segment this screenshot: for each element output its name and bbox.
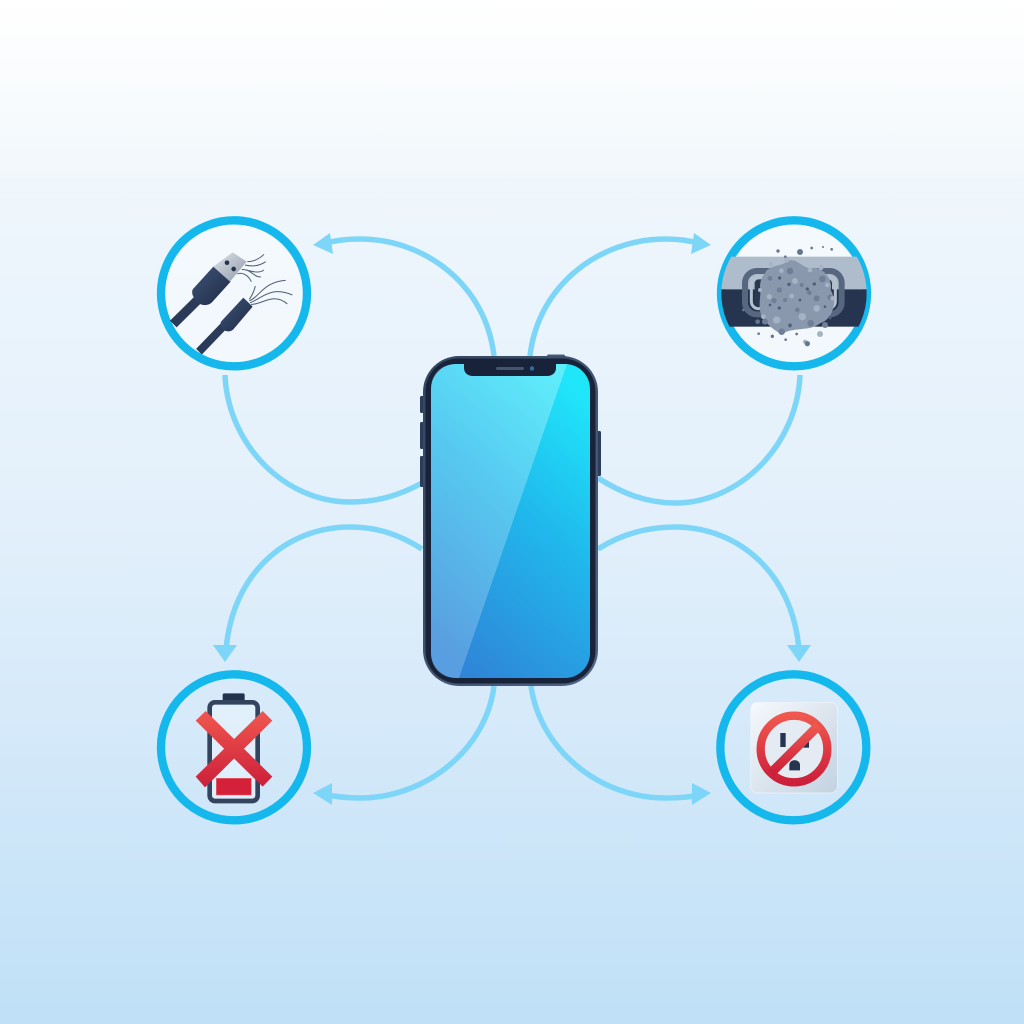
icon: dust clogged port xyxy=(720,220,867,366)
prohibition sign xyxy=(761,716,827,782)
phone frame xyxy=(423,356,598,686)
arrow: phone to dead battery xyxy=(213,527,422,662)
connector: dirty port to phone xyxy=(598,375,800,503)
arrow: phone to frayed cable xyxy=(313,233,494,356)
scattered dust specks xyxy=(742,246,833,346)
ring xyxy=(161,674,307,820)
red cross xyxy=(196,711,272,787)
low charge bar xyxy=(216,778,251,795)
battery body xyxy=(210,702,258,801)
ring xyxy=(721,220,867,366)
arrow: phone bottom to dead battery xyxy=(313,686,494,805)
port housing xyxy=(720,257,867,327)
side buttons xyxy=(420,354,601,487)
arrow: phone bottom to faulty outlet xyxy=(531,686,711,805)
screen reflection xyxy=(431,364,567,678)
ring xyxy=(161,220,307,366)
ring xyxy=(720,674,866,820)
phone bezel xyxy=(426,358,596,684)
outlet slots xyxy=(780,733,809,770)
cable one xyxy=(173,252,266,324)
icon: faulty wall outlet xyxy=(720,674,866,820)
arrow: phone to faulty outlet xyxy=(598,527,811,662)
outlet plate xyxy=(751,702,837,793)
battery cap xyxy=(223,693,245,701)
arrow: phone to dirty port xyxy=(530,233,711,356)
icon: dead battery xyxy=(161,674,307,820)
central smartphone xyxy=(420,354,601,686)
notch xyxy=(464,364,556,376)
dust cloud xyxy=(742,246,835,346)
cable two xyxy=(199,280,292,352)
icon: frayed USB cables xyxy=(161,220,307,366)
phone screen xyxy=(431,364,590,678)
speaker and camera xyxy=(496,366,534,371)
connector: frayed cable to phone xyxy=(225,375,422,502)
outlet face xyxy=(763,718,825,780)
